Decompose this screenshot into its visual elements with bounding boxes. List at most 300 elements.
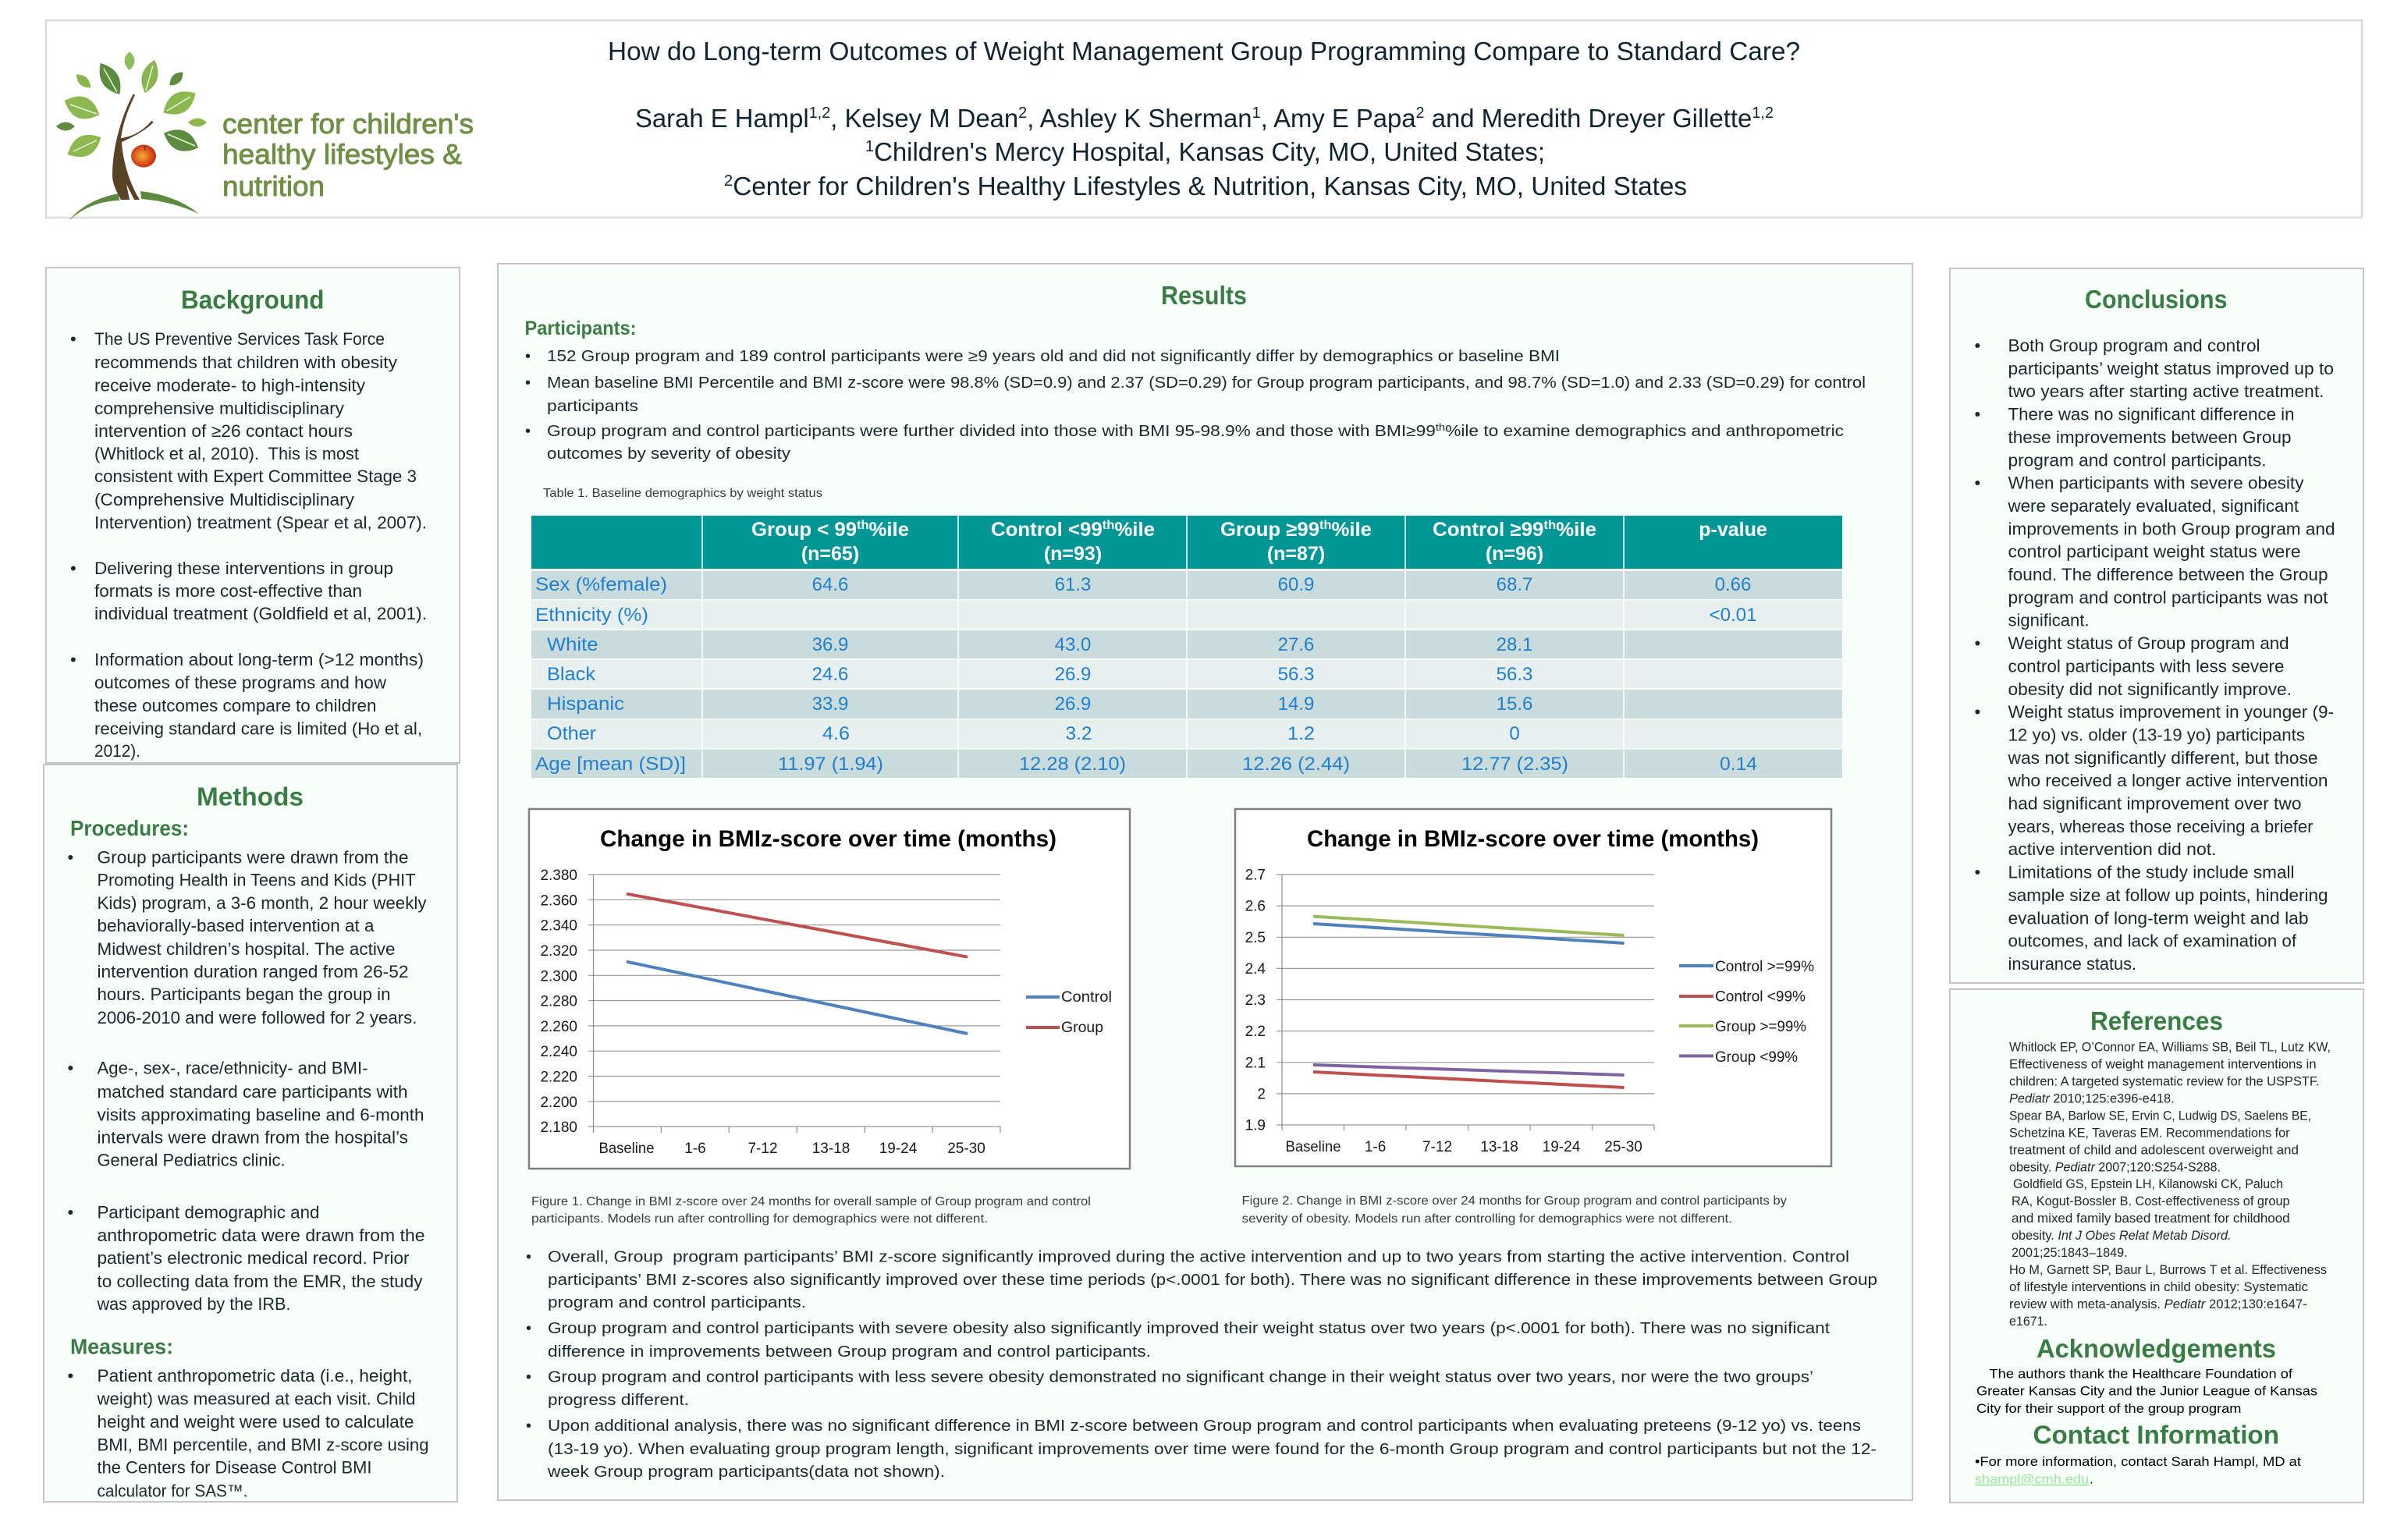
y axis labels: 2.300 <box>540 968 577 985</box>
y axis labels: 2.200 <box>540 1095 577 1111</box>
text block: measures bullet: calculator for SAS™. <box>97 1481 248 1501</box>
x axis labels <box>599 1141 985 1157</box>
y axis labels: 2.2 <box>1245 1024 1266 1040</box>
text block: participants bullets: • <box>525 423 531 440</box>
text block: conclusion 4: obesity did not significantly improve. <box>2008 680 2292 699</box>
table row: hispanic: 26.9 <box>1055 694 1091 715</box>
series: group <99% <box>1313 1065 1625 1075</box>
table row: age: Age [mean (SD)] <box>535 754 686 775</box>
table row: ethnicity: Ethnicity (%) <box>535 605 648 626</box>
reference 2 <box>2009 1109 2311 1174</box>
reference 2: Spear BA, Barlow SE, Ervin C, Ludwig DS, Saelens BE, <box>2009 1109 2311 1123</box>
text block: results findings bullets: week Group program participants(data not shown). <box>547 1464 945 1481</box>
reference 3: obesity. Int J Obes Relat Metab Disord. <box>2012 1229 2232 1243</box>
figure 1 caption: participants. Models run after controlling for demographics were not different. <box>531 1212 988 1226</box>
text block: measures bullet <box>67 1366 429 1501</box>
text block: conclusion 1 <box>1974 335 2334 401</box>
y axis labels: 2.7 <box>1245 868 1266 883</box>
subheading: procedures: Procedures: <box>70 816 189 840</box>
text block: results findings bullets: Overall, Group program participants’ BMI z-score significantly improved during the active intervention and up to two years from starting the active intervention. Control <box>548 1248 1849 1265</box>
authors: 1 <box>1252 105 1261 122</box>
text block: measures bullet: the Centers for Disease Control BMI <box>97 1457 371 1478</box>
text block: background bullet 2: • <box>70 559 76 578</box>
logo wordmark: center for children's <box>222 108 474 140</box>
table row: hispanic: 33.9 <box>812 694 848 715</box>
authors: 2 <box>1018 105 1027 122</box>
text block: background bullet 1: (Whitlock et al, 2010). This is most <box>94 444 359 463</box>
text block: procedures bullet 1: • <box>67 847 73 868</box>
panel: results <box>498 264 1912 1500</box>
text block: acknowledgements: Greater Kansas City and the Junior League of Kansas <box>1976 1385 2317 1399</box>
reference 2: Schetzina KE, Taveras EM. Recommendations for <box>2009 1126 2290 1140</box>
table header row: %ile <box>1114 519 1155 541</box>
text block: background bullet 1: • <box>70 329 76 349</box>
affiliation 2: Center for Children's Healthy Lifestyles & Nutrition, Kansas City, MO, United States <box>733 172 1687 200</box>
table row: white: White <box>547 634 598 655</box>
text block: acknowledgements <box>1976 1367 2317 1416</box>
chart legend: Group <99% <box>1715 1049 1798 1066</box>
text block: conclusion 2: program and control participants. <box>2008 450 2266 470</box>
table header row: th <box>1103 519 1114 532</box>
text block: conclusion 3: significant. <box>2008 611 2090 630</box>
x axis labels <box>1286 1139 1642 1155</box>
text block: participants bullets: %ile to examine demographics and anthropometric <box>1445 423 1844 440</box>
text block: procedures bullet 1: Group participants were drawn from the <box>97 847 409 868</box>
text block: participants bullets: Group program and control participants were further divided into those with BMI 95-98.9% and those with BMI≥99 <box>547 423 1330 440</box>
x axis labels: Baseline <box>1286 1139 1341 1155</box>
chart legend: Control >=99% <box>1715 959 1814 975</box>
text block: background bullet 1: Intervention) treatment (Spear et al, 2007). <box>94 513 427 532</box>
reference 3 <box>2012 1177 2290 1260</box>
line chart: figure 1 overall sample <box>529 809 1130 1169</box>
authors: 1,2 <box>809 105 830 122</box>
table row: hispanic <box>547 694 1532 715</box>
text block: background bullet 3: 2012). <box>94 741 140 761</box>
table header row: Control <99 <box>991 519 1099 541</box>
reference 1: children: A targeted systematic review for the USPSTF. <box>2009 1075 2320 1089</box>
authors: Sarah E Hampl <box>635 104 810 133</box>
table header row: p-value <box>1699 519 1767 541</box>
table row: black <box>547 664 1532 685</box>
y axis labels: 2.320 <box>540 943 577 960</box>
table header row: th <box>857 519 869 532</box>
y axis labels: 1.9 <box>1245 1117 1266 1134</box>
x axis labels: 1-6 <box>684 1141 706 1157</box>
affiliation 1: 1 <box>865 138 874 155</box>
text block: background bullet 1 <box>70 329 427 532</box>
affiliation 1: Children's Mercy Hospital, Kansas City, MO, United States; <box>874 137 1545 166</box>
table row: white: 28.1 <box>1497 634 1532 655</box>
text block: procedures bullet 1: hours. Participants began the group in <box>97 985 390 1004</box>
reference 3: 2001;25:1843–1849. <box>2012 1246 2128 1260</box>
header panel <box>46 20 2362 221</box>
y axis labels: 2.1 <box>1245 1055 1266 1071</box>
text block: conclusion 5: was not significantly different, but those <box>2007 748 2317 768</box>
text block: conclusion 2: these improvements between Group <box>2008 428 2291 447</box>
figure 2 caption: Figure 2. Change in BMI z-score over 24 months for Group program and control participants by <box>1242 1194 1787 1208</box>
table row: ethnicity: <0.01 <box>1709 605 1757 626</box>
text block: background bullet 3: these outcomes compare to children <box>94 696 376 715</box>
x axis labels: 7-12 <box>748 1141 778 1157</box>
heading: acknowledgements: Acknowledgements <box>2037 1334 2276 1363</box>
text block: participants bullets: Mean baseline BMI Percentile and BMI z-score were 98.8% (SD=0.9) and 2.37 (SD=0.29) for Group program participants, and 98.7% (SD=1.0) and 2.33 (SD=0.29) for control <box>547 374 1866 392</box>
chart title: Change in BMIz-score over time (months) <box>1307 826 1759 852</box>
poster title: How do Long-term Outcomes of Weight Management Group Programming Compare to Standard Care? <box>608 37 1800 66</box>
text block: results findings bullets: • <box>526 1320 531 1337</box>
table row: black: 56.3 <box>1497 664 1532 685</box>
table row: sex <box>535 574 1751 595</box>
panel: background <box>46 268 460 763</box>
text block: results findings bullets: Upon additional analysis, there was no significant difference in BMI z-score between Group program and control participants when evaluating preteens (9-12 yo) vs. teens <box>548 1418 1861 1435</box>
table header row: (n=87) <box>1267 543 1325 565</box>
logo wordmark: nutrition <box>222 170 325 202</box>
text block: background bullet 1: (Comprehensive Multidisciplinary <box>94 490 354 509</box>
reference 1: Effectiveness of weight management interventions in <box>2009 1058 2317 1072</box>
chart legend: Group >=99% <box>1715 1019 1806 1035</box>
text block: procedures bullet 2: General Pediatrics clinic. <box>97 1150 286 1170</box>
reference 4: e1671. <box>2009 1315 2047 1329</box>
reference 4: review with meta-analysis. Pediatr 2012;130:e1647- <box>2009 1297 2307 1311</box>
figure 1 caption <box>531 1195 1091 1226</box>
text block: background bullet 1: receive moderate- to high-intensity <box>94 376 365 395</box>
text block: procedures bullet 2: intervals were drawn from the hospital’s <box>97 1128 408 1147</box>
text block: procedures bullet 1: Midwest children’s hospital. The active <box>97 939 395 959</box>
affiliation 2: 2 <box>724 172 733 190</box>
text block: procedures bullet 3: • <box>67 1203 73 1222</box>
table row: age: 11.97 (1.94) <box>778 754 883 775</box>
text block: background bullet 3 <box>70 650 424 761</box>
figure 2 caption: severity of obesity. Models run after controlling for demographics were not different. <box>1242 1212 1732 1226</box>
table row: other: Other <box>547 723 596 744</box>
reference 4 <box>2009 1263 2327 1329</box>
text block: conclusion 5: 12 yo) vs. older (13-19 yo) participants <box>2008 726 2305 744</box>
authors: , Amy E Papa <box>1261 104 1416 133</box>
text block: procedures bullet 1: intervention duration ranged from 26-52 <box>97 962 409 981</box>
text block: procedures bullet 3: anthropometric data were drawn from the <box>97 1226 424 1245</box>
text block: participants bullets <box>525 348 1866 463</box>
text block: procedures bullet 2: • <box>67 1058 73 1078</box>
text block: conclusion 6: outcomes, and lack of examination of <box>2008 931 2297 951</box>
icon: tree with leaves and apple <box>56 51 207 221</box>
text block: conclusion 1: • <box>1974 335 1980 356</box>
text block: conclusion 5: who received a longer active intervention <box>2007 771 2328 790</box>
reference 3: RA, Kogut-Bossler B. Cost-effectiveness of group <box>2012 1194 2290 1208</box>
table row: age <box>535 754 1757 775</box>
text block: measures bullet: weight) was measured at each visit. Child <box>96 1389 415 1409</box>
text block: results findings bullets: Group program and control participants with severe obesity also significantly improved their weight status over two years (p<.0001 for both). There was no significant <box>548 1320 1830 1337</box>
table row: sex: 60.9 <box>1278 574 1314 595</box>
text block: conclusion 5: years, whereas those receiving a briefer <box>2008 817 2313 836</box>
text block: measures bullet: height and weight were used to calculate <box>97 1412 414 1432</box>
table row: white: 27.6 <box>1278 634 1314 655</box>
heading: results: Results <box>1161 281 1247 310</box>
table row: hispanic: 14.9 <box>1278 694 1314 715</box>
table header row <box>751 519 1767 565</box>
text block: conclusion 5: Weight status improvement in younger (9- <box>2008 702 2334 722</box>
text block: conclusion 3: When participants with severe obesity <box>2008 474 2303 493</box>
subheading: participants: Participants: <box>524 318 637 339</box>
table row: sex: 61.3 <box>1055 574 1091 595</box>
text block: conclusion 6: insurance status. <box>2008 954 2136 974</box>
text block: participants bullets: • <box>525 374 531 392</box>
table row: other <box>547 723 1520 744</box>
text block: background bullet 1: consistent with Expert Committee Stage 3 <box>94 467 417 486</box>
text block: background bullet 1: recommends that children with obesity <box>94 353 397 372</box>
text block: conclusion 3: found. The difference between the Group <box>2008 565 2328 584</box>
x axis labels: 13-18 <box>1480 1139 1518 1155</box>
text block: procedures bullet 1: behaviorally-based intervention at a <box>97 916 375 935</box>
table: baseline demographics <box>531 516 1842 778</box>
text block: conclusion 3 <box>1974 474 2335 630</box>
authors: 2 <box>1416 105 1425 122</box>
text block: conclusion 3: program and control participants was not <box>2008 587 2328 607</box>
series: control <box>627 962 968 1034</box>
text block: results findings bullets <box>526 1248 1877 1481</box>
table row: other: 4.6 <box>822 723 850 744</box>
panel: conclusions <box>1950 268 2363 983</box>
text block: conclusion 6 <box>1974 863 2328 974</box>
logo: center for children's healthy lifestyles and nutrition <box>56 51 474 221</box>
text block: contact details: . <box>2090 1473 2093 1487</box>
table header row: Control ≥99 <box>1433 519 1539 541</box>
chart legend: Group <box>1061 1020 1103 1036</box>
text block: conclusion 3: were separately evaluated, significant <box>2007 496 2299 516</box>
text block: conclusion 3: improvements in both Group program and <box>2008 519 2335 538</box>
x axis labels: 13-18 <box>812 1141 850 1157</box>
text block: procedures bullet 3: patient’s electronic medical record. Prior <box>97 1248 409 1268</box>
text block: results findings bullets: participants’ BMI z-scores also significantly improved over these time periods (p<.0001 for both). There was no significant difference in these improvements between Group <box>548 1272 1877 1289</box>
text block: conclusion 4 <box>1974 633 2292 699</box>
table row: sex: 0.66 <box>1715 574 1751 595</box>
table header row: (n=93) <box>1044 543 1102 565</box>
text block: results findings bullets: Group program and control participants with less severe obesity demonstrated no significant change in their weight status over two years, nor were the two groups’ <box>548 1368 1813 1386</box>
text block: background bullet 3: outcomes of these programs and how <box>94 672 386 693</box>
text block: results findings bullets: • <box>526 1418 531 1435</box>
heading: references: References <box>2090 1006 2223 1035</box>
reference 3: Goldfield GS, Epstein LH, Kilanowski CK, Paluch <box>2013 1177 2283 1191</box>
text block: participants bullets: th <box>1436 421 1445 433</box>
chart legend: Control <99% <box>1715 989 1806 1005</box>
reference 4: of lifestyle interventions in child obesity: Systematic <box>2009 1280 2308 1294</box>
text block: conclusion 3: control participant weight status were <box>2008 542 2300 562</box>
text block: conclusion 6: • <box>1974 863 1980 882</box>
table header row: (n=96) <box>1486 543 1543 565</box>
table row: ethnicity <box>535 605 1757 626</box>
chart gridlines and axes <box>1277 875 1654 1130</box>
text block: procedures bullet 2: visits approximating baseline and 6-month <box>97 1105 424 1125</box>
text block: procedures bullet 1 <box>67 847 426 1027</box>
text block: conclusion 5: • <box>1974 702 1980 722</box>
text block: conclusion 3: • <box>1974 474 1980 493</box>
text block: procedures bullet 1: Kids) program, a 3-6 month, 2 hour weekly <box>97 893 426 913</box>
heading: contact information: Contact Information <box>2033 1420 2279 1450</box>
text block: conclusion 1: Both Group program and control <box>2008 335 2260 356</box>
y axis labels: 2.280 <box>540 994 577 1010</box>
text block: results findings bullets: progress different. <box>548 1392 689 1409</box>
text block: results findings bullets: program and control participants. <box>548 1294 806 1311</box>
text block: participants bullets: • <box>525 348 531 365</box>
text block: background bullet 2: formats is more cost-effective than <box>94 581 362 601</box>
text block: measures bullet: Patient anthropometric data (i.e., height, <box>97 1366 412 1386</box>
table row: black: Black <box>547 664 596 685</box>
table row: other: 0 <box>1509 723 1520 744</box>
panel: methods <box>44 765 457 1502</box>
reference 1: Pediatr 2010;125:e396-e418. <box>2009 1092 2175 1106</box>
table header row: %ile <box>869 519 909 541</box>
text block: conclusion 2: There was no significant difference in <box>2008 405 2294 424</box>
table header row: th <box>1319 519 1332 532</box>
y axis labels: 2.260 <box>540 1019 577 1035</box>
authors: and Meredith Dreyer Gillette <box>1425 104 1752 133</box>
table row: hispanic: 15.6 <box>1497 694 1532 715</box>
text block: background bullet 2 <box>70 559 427 623</box>
y axis labels: 2.3 <box>1245 992 1266 1009</box>
table row: age: 12.26 (2.44) <box>1242 754 1350 775</box>
text block: measures bullet: BMI, BMI percentile, and BMI z-score using <box>97 1435 429 1454</box>
text block: conclusion 5 <box>1974 702 2334 859</box>
x axis labels: 25-30 <box>947 1141 985 1157</box>
text block: conclusion 6: evaluation of long-term weight and lab <box>2008 908 2308 928</box>
text block: participants bullets: outcomes by severity of obesity <box>547 445 790 463</box>
text block: background bullet 2: individual treatment (Goldfield et al, 2001). <box>94 604 427 623</box>
authors: 1,2 <box>1752 105 1774 122</box>
text block: conclusion 2: • <box>1974 405 1980 424</box>
x axis labels: 7-12 <box>1422 1139 1452 1155</box>
y axis labels: 2.340 <box>540 918 577 935</box>
y axis labels: 2.180 <box>540 1120 577 1136</box>
chart legend <box>1026 989 1112 1036</box>
chart gridlines and axes <box>588 875 1000 1133</box>
text block: conclusion 4: • <box>1974 633 1980 653</box>
text block: procedures bullet 1: 2006-2010 and were followed for 2 years. <box>97 1008 417 1027</box>
heading: methods: Methods <box>197 782 304 811</box>
table row: white <box>547 634 1532 655</box>
x axis labels: 1-6 <box>1365 1139 1386 1155</box>
table row: black: 56.3 <box>1278 664 1314 685</box>
reference 2: treatment of child and adolescent overweight and <box>2009 1143 2299 1157</box>
table row: black: 26.9 <box>1055 664 1091 685</box>
reference 4: Ho M, Garnett SP, Baur L, Burrows T et al. Effectiveness <box>2009 1263 2327 1277</box>
table header row: %ile <box>1556 519 1596 541</box>
text block: procedures bullet 2 <box>67 1058 424 1170</box>
table row: hispanic: Hispanic <box>547 694 624 715</box>
text block: conclusion 5: active intervention did not. <box>2008 839 2216 859</box>
chart legend: Control <box>1061 989 1112 1006</box>
text block: contact details: shampl@cmh.edu <box>1975 1473 2089 1487</box>
table header row: Group < 99 <box>751 519 854 541</box>
figure 2 caption <box>1242 1194 1787 1226</box>
chart title: Change in BMIz-score over time (months) <box>600 826 1056 852</box>
text block: background bullet 2: Delivering these interventions in group <box>94 559 393 578</box>
table row: age: 12.28 (2.10) <box>1019 754 1126 775</box>
reference 3: and mixed family based treatment for childhood <box>2012 1212 2290 1226</box>
reference 1: Whitlock EP, O’Connor EA, Williams SB, Beil TL, Lutz KW, <box>2009 1041 2331 1055</box>
table row: sex: 68.7 <box>1497 574 1532 595</box>
text block: conclusion 2 <box>1974 405 2294 470</box>
text block: conclusion 6: sample size at follow up points, hindering <box>2008 885 2328 905</box>
text block: conclusion 1: participants’ weight status improved up to <box>2008 359 2334 378</box>
chart legend <box>1679 959 1814 1066</box>
table caption: Table 1. Baseline demographics by weight status <box>543 487 822 500</box>
text block: background bullet 3: receiving standard care is limited (Ho et al, <box>94 719 422 738</box>
heading: background: Background <box>181 286 325 314</box>
text block: conclusion 1: two years after starting active treatment. <box>2008 381 2324 401</box>
text block: participants bullets: 152 Group program and 189 control participants were ≥9 years old and did not significantly differ by demographics or baseline BMI <box>547 348 1560 365</box>
text block: conclusion 4: Weight status of Group program and <box>2008 633 2289 653</box>
text block: procedures bullet 1: Promoting Health in Teens and Kids (PHIT <box>97 871 415 889</box>
logo wordmark <box>222 108 474 202</box>
table row: age: 0.14 <box>1720 754 1757 775</box>
text block: conclusion 6: Limitations of the study include small <box>2008 863 2294 882</box>
table header row: (n=65) <box>801 543 859 565</box>
text block: acknowledgements: The authors thank the Healthcare Foundation of <box>1990 1367 2292 1381</box>
heading: conclusions: Conclusions <box>2085 285 2227 314</box>
y axis labels: 2.380 <box>540 868 577 884</box>
table row: other: 3.2 <box>1066 723 1092 744</box>
table row: age: 12.77 (2.35) <box>1461 754 1568 775</box>
table row: other: 1.2 <box>1287 723 1315 744</box>
table row: sex: Sex (%female) <box>535 574 667 595</box>
text block: contact details <box>1975 1455 2301 1487</box>
series: group <box>627 894 968 957</box>
x axis labels: 19-24 <box>879 1141 918 1157</box>
authors: , Ashley K Sherman <box>1027 104 1252 133</box>
text block: measures bullet: • <box>67 1366 73 1386</box>
y axis labels: 2.360 <box>540 892 577 909</box>
authors: , Kelsey M Dean <box>830 104 1018 133</box>
table row: black: 24.6 <box>812 664 848 685</box>
x axis labels: 25-30 <box>1604 1139 1642 1155</box>
table row: white: 36.9 <box>812 634 848 655</box>
y axis labels: 2 <box>1257 1086 1266 1102</box>
logo wordmark: healthy lifestyles & <box>222 138 462 170</box>
series: control >=99% <box>1313 924 1625 943</box>
text block: conclusion 4: control participants with less severe <box>2008 656 2285 676</box>
text block: participants bullets: participants <box>547 398 638 415</box>
x axis labels: 19-24 <box>1543 1139 1581 1155</box>
reference 2: obesity. Pediatr 2007;120:S254-S288. <box>2009 1160 2221 1174</box>
y axis labels <box>1245 868 1266 1134</box>
text block: procedures bullet 2: matched standard care participants with <box>97 1082 407 1102</box>
series: group >=99% <box>1313 917 1625 935</box>
text block: procedures bullet 3: to collecting data from the EMR, the study <box>97 1272 423 1291</box>
table header row: th <box>1543 519 1556 532</box>
y axis labels: 2.220 <box>540 1069 577 1086</box>
y axis labels: 2.5 <box>1245 930 1266 946</box>
text block: results findings bullets: • <box>526 1248 531 1265</box>
text block: acknowledgements: City for their support of the group program <box>1976 1402 2241 1416</box>
text block: results findings bullets: (13-19 yo). When evaluating group program length, significant improvements over time were found for the 6-month Group program and control participants but not the 12- <box>548 1441 1877 1458</box>
table header row: %ile <box>1332 519 1372 541</box>
text block: results findings bullets: difference in improvements between Group program and control participants. <box>548 1343 1151 1361</box>
y axis labels: 2.4 <box>1245 961 1266 978</box>
text block: background bullet 1: intervention of ≥26 contact hours <box>94 421 353 441</box>
y axis labels: 2.6 <box>1245 899 1266 915</box>
table header row: Group ≥99 <box>1220 519 1316 541</box>
subheading: measures: Measures: <box>70 1334 173 1359</box>
text block: contact details: •For more information, contact Sarah Hampl, MD at <box>1975 1455 2301 1469</box>
reference 1 <box>2009 1041 2331 1106</box>
series: control <99% <box>1313 1072 1625 1088</box>
text block: background bullet 1: The US Preventive Services Task Force <box>94 329 385 349</box>
text block: background bullet 3: • <box>70 650 76 669</box>
text block: procedures bullet 2: Age-, sex-, race/ethnicity- and BMI- <box>97 1058 368 1078</box>
text block: results findings bullets: • <box>526 1368 531 1386</box>
text block: background bullet 3: Information about long-term (>12 months) <box>94 650 424 669</box>
y axis labels: 2.240 <box>540 1044 577 1060</box>
text block: conclusion 5: had significant improvement over two <box>2008 794 2302 813</box>
table row: white: 43.0 <box>1055 634 1091 655</box>
